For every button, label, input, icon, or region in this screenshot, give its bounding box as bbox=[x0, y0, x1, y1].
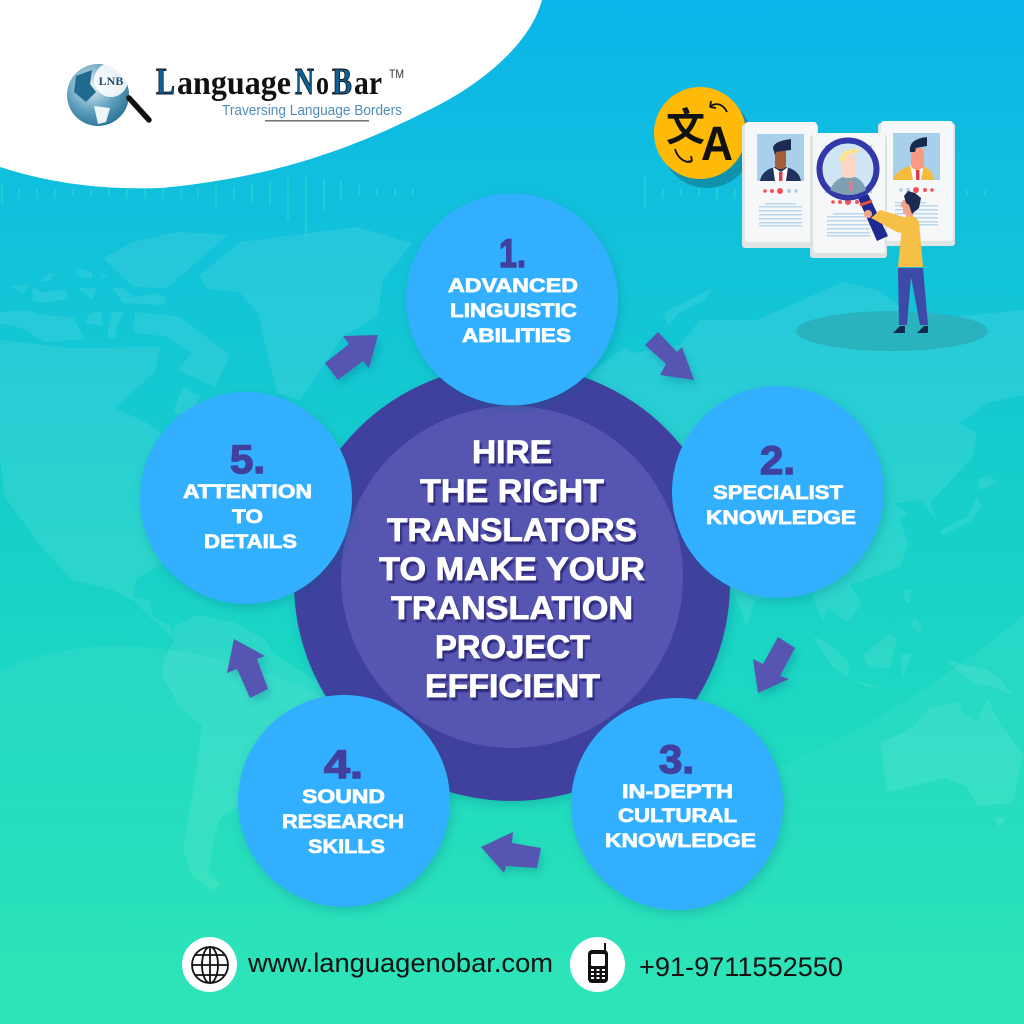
card: right candidate bbox=[878, 121, 955, 246]
logo wordmark: TM bbox=[389, 69, 404, 81]
footer contact: phone: +91-9711552550 bbox=[639, 952, 843, 982]
step 4: sound research skills: RESEARCH bbox=[282, 811, 404, 833]
card: middle candidate bbox=[810, 133, 887, 258]
icon: translate badge: 文 bbox=[666, 97, 705, 153]
icon: globe with magnifier bbox=[67, 63, 149, 126]
step 4: sound research skills: 4. bbox=[324, 743, 363, 787]
arrow: 1 to 2 bbox=[645, 332, 694, 380]
card: left candidate bbox=[742, 122, 818, 248]
step 5: attention to details: TO bbox=[232, 506, 263, 528]
arrow: 4 to 5 bbox=[227, 639, 268, 698]
logo tagline: Traversing Language Borders bbox=[222, 103, 402, 119]
step 5: attention to details: ATTENTION bbox=[183, 481, 312, 503]
central heading: TO MAKE YOUR bbox=[379, 551, 645, 587]
step 2: specialist knowledge: KNOWLEDGE bbox=[706, 507, 856, 529]
central heading: THE RIGHT bbox=[420, 473, 604, 509]
step 4: sound research skills: SOUND bbox=[302, 786, 385, 808]
arrow: 3 to 4 bbox=[481, 832, 541, 873]
step 2: specialist knowledge: 2. bbox=[760, 439, 795, 483]
illustration: translator search bbox=[654, 87, 988, 351]
step 1: advanced linguistic abilities: ABILITIES bbox=[462, 325, 571, 347]
step 3: in-depth cultural knowledge: KNOWLEDGE bbox=[605, 830, 756, 852]
logo bbox=[67, 61, 404, 126]
logo wordmark: B bbox=[332, 61, 352, 103]
world map backdrop bbox=[0, 227, 1024, 905]
footer contact: website: www.languagenobar.com bbox=[247, 948, 553, 978]
step 3: in-depth cultural knowledge bbox=[571, 698, 783, 910]
shadow ellipse under person bbox=[796, 311, 988, 351]
step 1: advanced linguistic abilities: 1. bbox=[499, 232, 526, 276]
step 3: in-depth cultural knowledge: CULTURAL bbox=[618, 805, 737, 827]
logo wordmark: anguage bbox=[177, 65, 291, 102]
step 1: advanced linguistic abilities: ADVANCED bbox=[448, 275, 578, 297]
footer contact: phone bbox=[570, 937, 843, 992]
icon: translate badge: A bbox=[701, 118, 733, 171]
step 3: in-depth cultural knowledge: IN-DEPTH bbox=[622, 781, 733, 803]
central heading: TRANSLATORS bbox=[387, 512, 637, 548]
step 2: specialist knowledge: SPECIALIST bbox=[713, 482, 843, 504]
arrow: 5 to 1 bbox=[325, 335, 378, 380]
central circle: inner disc bbox=[341, 406, 683, 748]
step 4: sound research skills: SKILLS bbox=[308, 836, 385, 858]
tick marks strip bbox=[1, 175, 986, 236]
central heading: HIRE bbox=[472, 434, 552, 470]
central circle: outer ring bbox=[294, 365, 730, 801]
icon: translate badge bbox=[654, 87, 753, 188]
logo wordmark bbox=[156, 61, 404, 103]
logo wordmark: o bbox=[316, 65, 329, 102]
logo wordmark: ar bbox=[354, 65, 382, 102]
central heading: EFFICIENT bbox=[425, 668, 600, 704]
logo wordmark: L bbox=[156, 61, 175, 103]
arrow: 2 to 3 bbox=[753, 637, 795, 693]
step 2: specialist knowledge bbox=[672, 386, 884, 598]
central heading bbox=[379, 434, 645, 704]
step 5: attention to details bbox=[140, 392, 352, 604]
step 3: in-depth cultural knowledge: 3. bbox=[659, 738, 694, 782]
icon: globe with magnifier: LNB bbox=[99, 74, 123, 88]
central heading: TRANSLATION bbox=[391, 590, 633, 626]
step 5: attention to details: DETAILS bbox=[204, 531, 297, 553]
logo wordmark: N bbox=[295, 61, 314, 103]
step 5: attention to details: 5. bbox=[230, 438, 265, 482]
central heading: PROJECT bbox=[435, 629, 590, 665]
step 4: sound research skills bbox=[238, 695, 450, 907]
step 1: advanced linguistic abilities bbox=[406, 194, 618, 406]
step 1: advanced linguistic abilities: LINGUISTIC bbox=[450, 300, 577, 322]
magnifying glass bbox=[820, 140, 888, 241]
footer contact: website bbox=[182, 937, 553, 992]
white header shape bbox=[0, 0, 542, 188]
person figure bbox=[864, 191, 928, 333]
